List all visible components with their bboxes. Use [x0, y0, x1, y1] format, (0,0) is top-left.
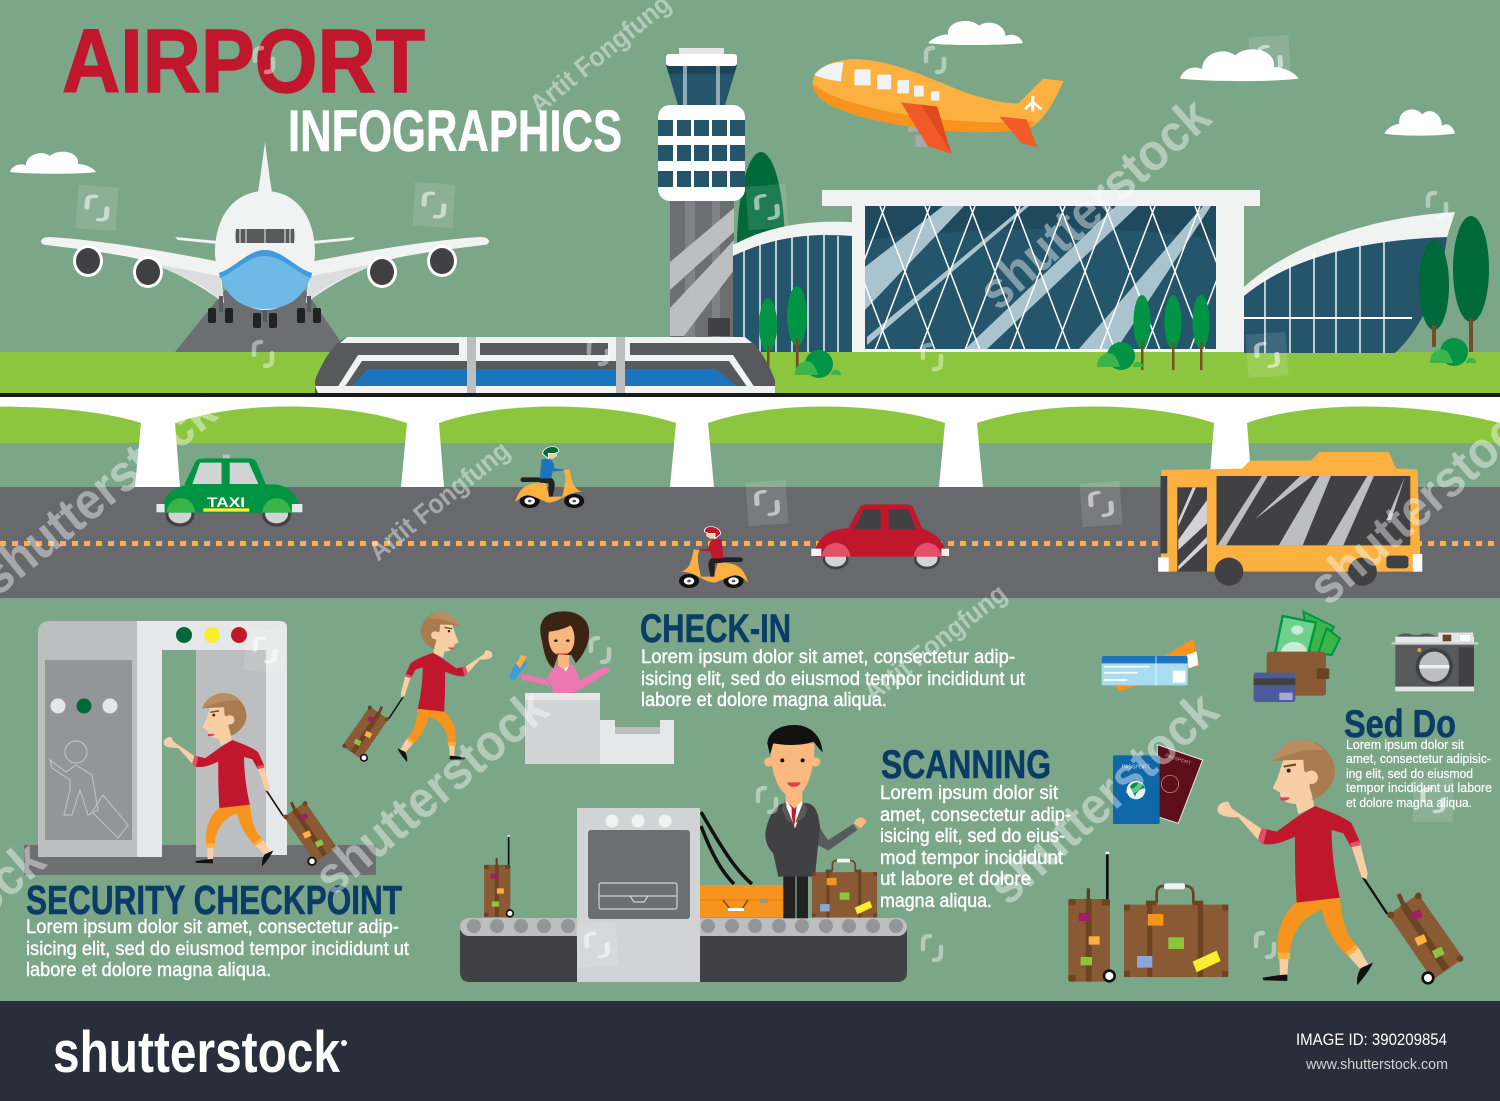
- text block: scanning: ut labore et dolore: [880, 869, 1031, 890]
- text block: scanning: amet, consectetur adip-: [880, 805, 1071, 826]
- heading: security checkpoint: SECURITY CHECKPOINT: [26, 877, 402, 923]
- icon: suitcase: [1124, 883, 1228, 977]
- scooter rider, red helmet: [679, 527, 748, 588]
- large traveller with luggage: [1217, 739, 1463, 985]
- panel: travel items: [1068, 612, 1478, 983]
- text block: security checkpoint: Lorem ipsum dolor sit amet, consectetur adip-: [26, 917, 399, 938]
- green taxi: [156, 455, 302, 527]
- icon: boarding passes: [1102, 638, 1199, 692]
- text block: scanning: [880, 783, 1071, 912]
- trees and bushes: [759, 216, 1489, 378]
- control tower: [658, 48, 745, 340]
- registered mark: [341, 1040, 347, 1046]
- footer logo: shutterstock: [53, 1020, 341, 1085]
- icon: camera: [1392, 632, 1478, 691]
- icon: wallet with cash and card: [1254, 612, 1340, 702]
- text block: check-in: isicing elit, sed do eiusmod tempor incididunt ut: [641, 669, 1026, 690]
- image id: IMAGE ID: 390209854: [1296, 1030, 1447, 1049]
- text block: scanning: isicing elit, sed do eius-: [880, 826, 1065, 847]
- traveller at check-in: [342, 612, 492, 762]
- watermark icon overlay: [76, 35, 1453, 968]
- text block: scanning: Lorem ipsum dolor sit: [880, 783, 1059, 804]
- text block: check-in: [641, 647, 1026, 711]
- watermark text overlay: Artit Fongfung: [858, 578, 1012, 708]
- security man walking through gate with luggage: [164, 693, 337, 866]
- grass strip: [0, 352, 1500, 393]
- red car: [811, 504, 949, 569]
- x-ray silhouette: [50, 741, 128, 838]
- text block: scanning: magna aliqua.: [880, 891, 992, 912]
- check-in agent: [509, 611, 611, 693]
- watermark text overlay: shutterstock: [968, 87, 1222, 321]
- icon: passports: PASSPORT: [1122, 764, 1151, 770]
- text block: sed do: [1346, 738, 1492, 810]
- text block: check-in: Lorem ipsum dolor sit amet, consectetur adip-: [641, 647, 1015, 668]
- heading: scanning: SCANNING: [881, 743, 1051, 787]
- heading: check-in: CHECK-IN: [640, 607, 791, 651]
- airport train: [315, 337, 775, 393]
- text block: security checkpoint: isicing elit, sed do eiusmod tempor incididunt ut: [26, 939, 410, 960]
- road: [0, 487, 1500, 598]
- title: AIRPORT: AIRPORT: [62, 12, 425, 112]
- taxi sign text: TAXI: [207, 494, 245, 510]
- icon: passports: [1113, 745, 1203, 824]
- watermark text overlay: Artit Fongfung: [363, 435, 515, 567]
- black track line: [0, 393, 1500, 397]
- icon: passports: PASSPORT: [1164, 753, 1192, 767]
- heading: sed do: Sed Do: [1344, 703, 1456, 746]
- watermark text overlay: shutterstock: [303, 679, 559, 906]
- scooter rider, blue shirt: [515, 447, 584, 508]
- text block: sed do: Lorem ipsum dolor sit: [1346, 738, 1465, 752]
- text block: scanning: mod tempor incididunt: [880, 848, 1064, 869]
- text block: sed do: ing elit, sed do eiusmod: [1346, 767, 1473, 781]
- text block: check-in: labore et dolore magna aliqua.: [641, 690, 887, 711]
- text block: sed do: et dolore magna aliqua.: [1346, 796, 1472, 810]
- subtitle: INFOGRAPHICS: INFOGRAPHICS: [288, 99, 622, 164]
- orange airplane taking off: [813, 59, 1064, 154]
- text block: sed do: tempor incididunt ut labore: [1346, 781, 1492, 795]
- text block: security checkpoint: [26, 917, 410, 981]
- text block: sed do: amet, consectetur adipisic-: [1346, 752, 1491, 766]
- terminal building: [733, 190, 1455, 353]
- text block: security checkpoint: labore et dolore magna aliqua.: [26, 960, 271, 981]
- dark tree behind tower: [737, 152, 785, 344]
- icon: trolley bag: [1068, 852, 1116, 983]
- footer bar: [0, 1001, 1500, 1101]
- suitcase beside officer: [812, 859, 877, 917]
- large airliner, front view: [41, 142, 489, 352]
- check-in desk: [525, 693, 674, 764]
- watermark text overlay: shutterstock: [977, 681, 1229, 916]
- yellow bus: [1158, 452, 1422, 586]
- baggage scanner and conveyor: [460, 808, 907, 982]
- clouds: [10, 21, 1455, 174]
- website: www.shutterstock.com: [1305, 1056, 1448, 1073]
- panel: security checkpoint gate: [24, 621, 376, 875]
- elevated viaduct with arches: [0, 397, 1500, 487]
- security officer: [764, 725, 867, 918]
